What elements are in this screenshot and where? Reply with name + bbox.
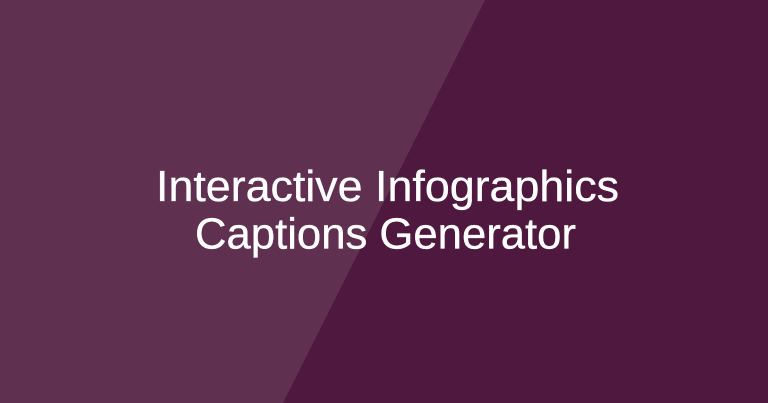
title: [156, 163, 619, 258]
background: lighter diagonal panel: [0, 0, 485, 403]
title line 2: Captions Generator: [195, 210, 576, 258]
title line 1: Interactive Infographics: [156, 163, 619, 211]
